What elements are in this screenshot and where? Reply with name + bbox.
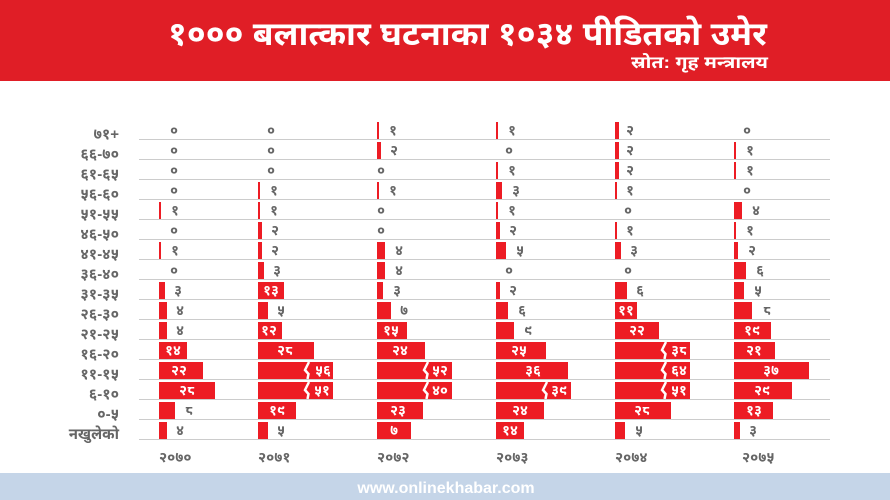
age group labels <box>69 126 120 444</box>
title: १००० बलात्कार घटनाका १०३४ पीडितको उमेर <box>168 14 768 52</box>
column 2072: ० <box>377 162 385 178</box>
column 2073: २ <box>509 282 517 298</box>
column 2075: ४ <box>752 202 760 218</box>
age group labels: नखुलेको <box>69 425 120 444</box>
column 2072: २४ <box>392 342 408 358</box>
column 2071 <box>258 122 333 439</box>
column 2073: ६ <box>518 302 526 318</box>
column 2074: ० <box>624 202 632 218</box>
age group labels: १६-२० <box>80 346 119 363</box>
column 2071: ० <box>267 162 275 178</box>
column 2072: ३ <box>393 282 401 298</box>
column 2071: ३ <box>273 262 281 278</box>
column 2072: १ <box>389 122 397 138</box>
column 2073: २४ <box>512 402 528 418</box>
column 2072: ० <box>377 202 385 218</box>
column 2072: ७ <box>400 302 408 318</box>
column 2071: ५ <box>277 422 285 438</box>
column 2074: २ <box>626 142 634 158</box>
column 2070: ० <box>170 262 178 278</box>
age group labels: ६६-७० <box>80 146 119 163</box>
column 2070: १ <box>171 242 179 258</box>
column 2073: १ <box>508 162 516 178</box>
header banner <box>0 0 890 81</box>
column 2071: १९ <box>269 402 285 418</box>
column 2071: १ <box>270 202 278 218</box>
column 2073: ३९ <box>551 382 567 398</box>
column 2074: ११ <box>618 302 634 318</box>
column 2075: २१ <box>746 342 762 358</box>
age group labels: २१-२५ <box>80 326 119 343</box>
column 2074: २ <box>626 122 634 138</box>
column 2071: ५ <box>277 302 285 318</box>
column 2070: ० <box>170 222 178 238</box>
age group labels: २६-३० <box>80 306 119 323</box>
column 2074: २२ <box>629 322 645 338</box>
column 2071: ० <box>267 122 275 138</box>
column 2075: ८ <box>763 302 771 318</box>
column 2072: २ <box>390 142 398 158</box>
column 2074: ६ <box>636 282 644 298</box>
column 2072: ० <box>377 222 385 238</box>
column 2074: ५ <box>635 422 643 438</box>
column 2075: ० <box>743 182 751 198</box>
column 2074: ६४ <box>671 362 687 378</box>
age group labels: ५६-६० <box>80 186 119 203</box>
column 2072 <box>377 122 452 439</box>
column 2075: ० <box>743 122 751 138</box>
column 2070: १ <box>171 202 179 218</box>
age group labels: ७१+ <box>93 126 119 143</box>
column 2071: २ <box>271 242 279 258</box>
column 2070: ० <box>170 142 178 158</box>
year axis labels: २०७३ <box>496 450 528 466</box>
column 2072: १५ <box>383 322 399 338</box>
column 2070: ० <box>170 162 178 178</box>
column 2075: ६ <box>756 262 764 278</box>
column 2072: ७ <box>390 422 398 438</box>
column 2073: १ <box>508 122 516 138</box>
column 2073: ० <box>505 262 513 278</box>
column 2070: ० <box>170 122 178 138</box>
column 2071: २ <box>271 222 279 238</box>
column 2075: ३ <box>749 422 757 438</box>
column 2073: ० <box>505 142 513 158</box>
column 2075: २ <box>748 242 756 258</box>
age group labels: ६-१० <box>89 386 119 403</box>
column 2073: १४ <box>502 422 518 438</box>
website: www.onlinekhabar.com <box>356 480 535 497</box>
column 2075: २९ <box>754 382 770 398</box>
column 2071: १२ <box>261 322 277 338</box>
column 2070: ४ <box>176 422 184 438</box>
column 2072: २३ <box>390 402 406 418</box>
age group labels: ४१-४५ <box>80 246 119 263</box>
year axis labels: २०७२ <box>377 450 409 466</box>
column 2073: १ <box>508 202 516 218</box>
column 2070: ३ <box>174 282 182 298</box>
column 2074: ३ <box>630 242 638 258</box>
column 2074: २८ <box>634 402 650 418</box>
column 2072: ४ <box>395 242 403 258</box>
column 2074: ३८ <box>671 342 687 358</box>
column 2073: ३६ <box>525 362 541 378</box>
column 2074 <box>615 122 690 439</box>
column 2075: १ <box>746 222 754 238</box>
column 2072: ५२ <box>432 362 448 378</box>
source: स्रोत: गृह मन्त्रालय <box>631 52 769 73</box>
column 2070 <box>159 122 215 439</box>
age group labels: ११-१५ <box>80 366 119 383</box>
age group labels: ३६-४० <box>80 266 119 283</box>
column 2075: १३ <box>746 402 762 418</box>
year axis labels <box>159 450 774 466</box>
column 2075: १९ <box>744 322 760 338</box>
year axis labels: २०७० <box>159 450 191 466</box>
column 2073: ९ <box>524 322 532 338</box>
column 2071: १ <box>270 182 278 198</box>
column 2072: ४ <box>395 262 403 278</box>
year axis labels: २०७१ <box>258 450 290 466</box>
column 2072: १ <box>389 182 397 198</box>
age group labels: ६१-६५ <box>80 166 119 183</box>
column 2073: २ <box>509 222 517 238</box>
column 2074: १ <box>626 182 634 198</box>
column 2073: ५ <box>516 242 524 258</box>
column 2072: ४० <box>432 382 448 398</box>
column 2075 <box>734 122 809 439</box>
age group labels: ४६-५० <box>80 226 119 243</box>
column 2071: २८ <box>277 342 293 358</box>
column 2073 <box>496 122 571 439</box>
column 2070: ४ <box>176 302 184 318</box>
column 2070: ४ <box>176 322 184 338</box>
year axis labels: २०७४ <box>615 450 647 466</box>
column 2073: ३ <box>512 182 520 198</box>
column 2071: ५६ <box>315 362 331 378</box>
age group labels: ०-५ <box>97 406 119 423</box>
age group labels: ३१-३५ <box>80 286 119 303</box>
column 2070: १४ <box>165 342 181 358</box>
column 2070: २२ <box>171 362 187 378</box>
column 2074: ५१ <box>671 382 687 398</box>
column 2070: २८ <box>179 382 195 398</box>
column 2074: ० <box>624 262 632 278</box>
column 2074: २ <box>626 162 634 178</box>
column 2075: ५ <box>754 282 762 298</box>
column 2070: ८ <box>185 402 193 418</box>
column 2075: १ <box>746 142 754 158</box>
footer band <box>0 473 890 500</box>
column 2071: १३ <box>263 282 279 298</box>
column 2075: १ <box>746 162 754 178</box>
age group labels: ५१-५५ <box>80 206 119 223</box>
year axis labels: २०७५ <box>742 450 774 466</box>
column 2074: १ <box>626 222 634 238</box>
column 2071: ० <box>267 142 275 158</box>
column 2071: ५१ <box>314 382 330 398</box>
column 2075: ३७ <box>763 362 779 378</box>
column 2070: ० <box>170 182 178 198</box>
column 2073: २५ <box>511 342 527 358</box>
